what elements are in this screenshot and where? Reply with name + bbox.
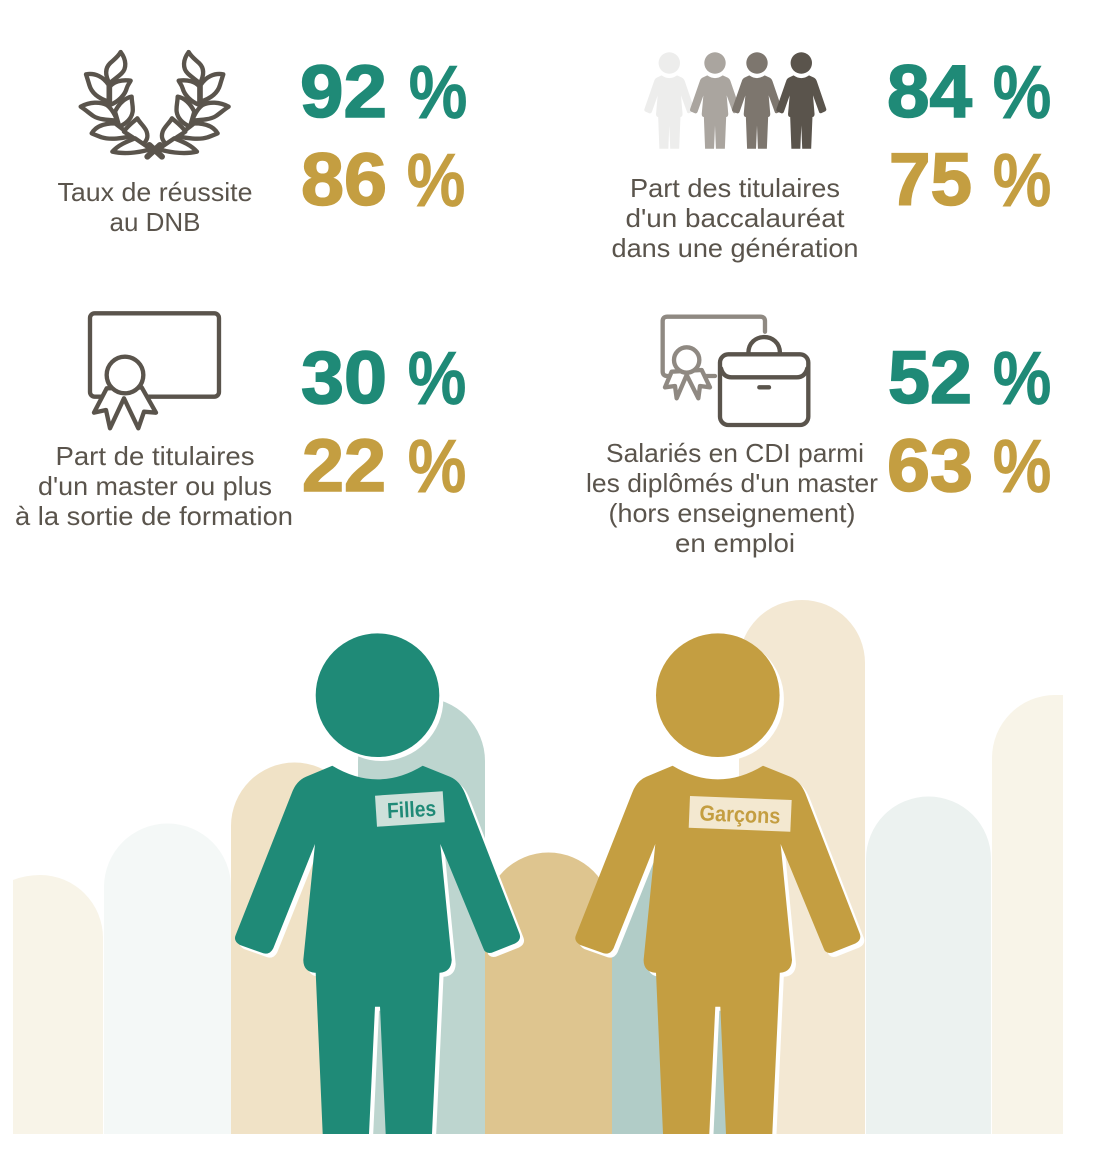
figures: CDI garçons 63 % — [887, 424, 1051, 507]
label: taux de réussite au DNB: au DNB — [110, 207, 200, 237]
label: salariés en CDI: Salariés en CDI parmi — [606, 438, 864, 468]
figures: baccalauréat filles 84 %: % — [993, 53, 1051, 133]
label: taux de réussite au DNB: Taux de réussite — [58, 177, 252, 207]
icon: laurel wreath — [81, 52, 229, 157]
figures: baccalauréat filles 84 %: 84 — [887, 50, 972, 133]
icon: four people holding hands — [645, 52, 826, 148]
figures: master garçons 22 %: 22 — [302, 424, 386, 507]
label: salariés en CDI: (hors enseignement) — [608, 498, 856, 528]
figures: CDI garçons 63 %: % — [993, 427, 1051, 507]
figure: boy — [575, 633, 864, 1138]
label: part de titulaires d'un master: Part de titulaires — [56, 441, 255, 471]
figure: girl — [235, 633, 524, 1138]
figures: baccalauréat garçons 75 % — [889, 138, 1051, 221]
figures: master filles 30 % — [301, 336, 466, 419]
figures: DNB filles 92 % — [300, 50, 467, 133]
figures: DNB filles 92 %: % — [409, 53, 467, 133]
tag: Garçons: Garçons — [699, 800, 781, 829]
figures: master garçons 22 % — [302, 424, 466, 507]
background: rounded columns — [13, 600, 1063, 1134]
label: salariés en CDI — [586, 438, 878, 558]
figures: master filles 30 %: 30 — [301, 336, 387, 419]
figures: CDI filles 52 %: 52 — [888, 336, 972, 419]
tag: Filles: Filles — [386, 796, 437, 823]
label: part des titulaires du baccalauréat: d'un baccalauréat — [626, 203, 845, 233]
tag: Filles — [375, 791, 445, 827]
figures: master garçons 22 %: % — [408, 427, 466, 507]
figures: DNB garçons 86 %: 86 — [301, 138, 387, 221]
label: taux de réussite au DNB — [58, 177, 252, 237]
icon: diploma and briefcase — [663, 317, 808, 425]
figures: CDI garçons 63 %: 63 — [887, 424, 973, 507]
figures: DNB garçons 86 % — [301, 138, 465, 221]
label: part de titulaires d'un master — [15, 441, 293, 531]
figures: baccalauréat filles 84 % — [887, 50, 1051, 133]
figures: DNB filles 92 %: 92 — [300, 50, 387, 133]
label: salariés en CDI: en emploi — [675, 528, 795, 558]
label: part de titulaires d'un master: à la sortie de formation — [15, 501, 293, 531]
figures: baccalauréat garçons 75 %: % — [993, 141, 1051, 221]
figures: baccalauréat garçons 75 %: 75 — [889, 138, 972, 221]
label: part de titulaires d'un master: d'un master ou plus — [38, 471, 272, 501]
label: part des titulaires du baccalauréat: Part des titulaires — [630, 173, 840, 203]
figures: CDI filles 52 %: % — [993, 339, 1051, 419]
label: salariés en CDI: les diplômés d'un master — [586, 468, 878, 498]
figures: CDI filles 52 % — [888, 336, 1051, 419]
label: part des titulaires du baccalauréat — [612, 173, 858, 263]
figures: master filles 30 %: % — [408, 339, 466, 419]
icon: diploma with rosette — [90, 313, 219, 428]
label: part des titulaires du baccalauréat: dans une génération — [612, 233, 858, 263]
figures: DNB garçons 86 %: % — [407, 141, 465, 221]
